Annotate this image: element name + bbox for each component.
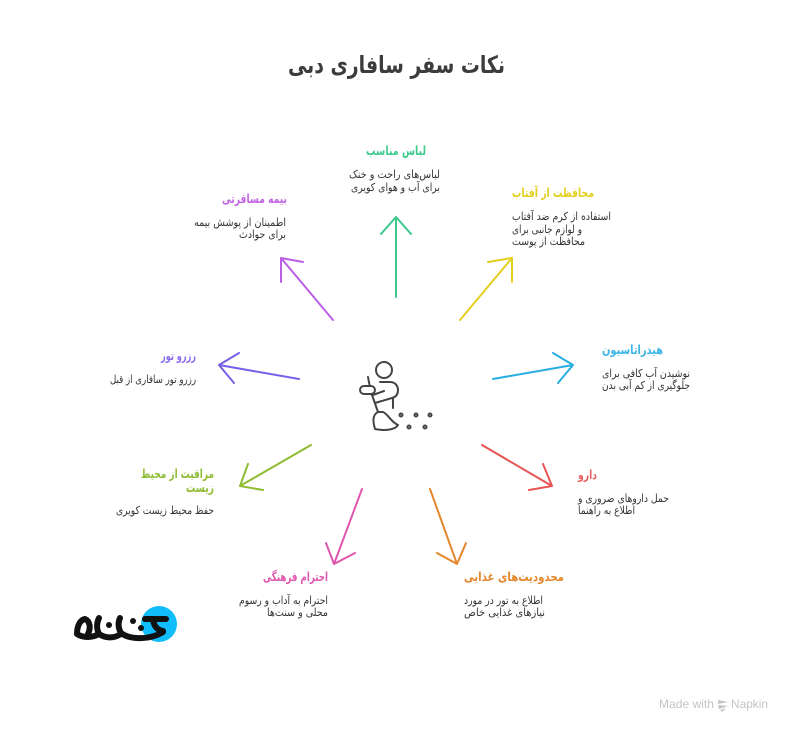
title: نکات سفر سافاری دبی [288,51,505,79]
block: sun protection: و لوازم جانبی برای [512,223,582,236]
block: appropriate clothing: برای آب و هوای کویری [351,180,440,194]
block: sun protection: محافظت از پوست [512,235,585,248]
block: sun protection: محافظت از آفتاب [512,185,594,200]
block: appropriate clothing: لباس مناسب [366,143,426,158]
block: medicine: اطلاع به راهنما [578,504,635,517]
arrow: sun protection [460,258,512,320]
central icon: traveller with broom and dots [360,362,432,430]
block: medicine [577,467,669,517]
block: hydration: نوشیدن آب کافی برای [602,366,690,380]
block: environment [116,466,214,517]
block: cultural respect: محلی و سنت‌ها [267,606,328,619]
arrow: appropriate clothing [381,217,411,297]
icon: brand logo mark [77,606,177,642]
arrow: environment [240,445,311,490]
block: sun protection: استفاده از کرم ضد آفتاب [512,209,611,223]
block: environment: زیست [186,480,214,495]
block: dietary restrictions [464,569,564,619]
block: sun protection [512,185,611,248]
footer: Made with Napkin: Napkin [731,697,768,711]
arrow: medicine [482,445,552,490]
arrow: tour booking [219,353,299,383]
block: dietary restrictions: اطلاع به تور در مورد [464,594,543,607]
block: cultural respect [239,569,328,619]
footer: Made with Napkin: Made with [659,697,714,711]
block: appropriate clothing: لباس‌های راحت و خنک [349,168,440,181]
arrow: dietary restrictions [430,489,466,564]
arrow: travel insurance [281,258,333,320]
block: hydration: جلوگیری از کم آبی بدن [602,378,690,392]
block: tour booking: رزرو تور [160,348,196,363]
arrow: cultural respect [326,489,362,564]
block: appropriate clothing [349,143,440,194]
block: medicine: دارو [577,467,597,482]
block: hydration [602,342,690,392]
block: environment: حفظ محیط زیست کویری [116,504,214,517]
block: tour booking: رزرو تور سافاری از قبل [110,373,196,386]
block: environment: مراقبت از محیط [141,466,214,481]
block: travel insurance: بیمه مسافرتی [222,191,287,206]
block: cultural respect: احترام فرهنگی [263,569,328,585]
block: dietary restrictions: نیازهای غذایی خاص [464,606,545,619]
block: cultural respect: احترام به آداب و رسوم [239,593,328,607]
footer: Made with Napkin [659,697,768,712]
block: travel insurance: اطمینان از پوشش بیمه [194,216,286,229]
block: dietary restrictions: محدودیت‌های غذایی [464,569,564,584]
block: hydration: هیدراتاسیون [602,342,663,357]
block: travel insurance: برای حوادث [239,228,286,241]
block: travel insurance [194,191,287,241]
block: tour booking [110,348,196,386]
block: medicine: حمل داروهای ضروری و [577,492,669,505]
arrow: hydration [493,353,573,383]
